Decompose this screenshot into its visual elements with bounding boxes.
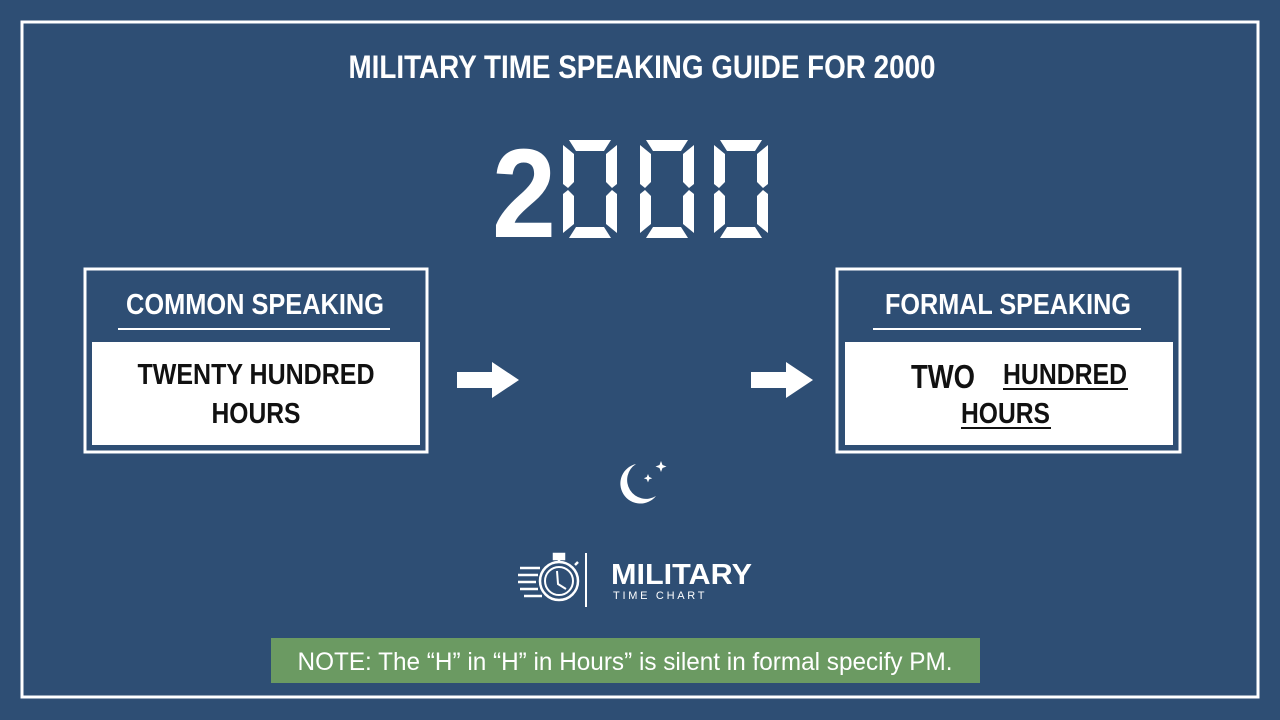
panel: formal speaking: HOURS (961, 398, 1050, 430)
panel: common speaking: HOURS (212, 398, 300, 430)
arrow left (457, 362, 519, 398)
logo: military time chart (518, 553, 752, 607)
panel: formal speaking: FORMAL SPEAKING (885, 289, 1131, 321)
panel: common speaking (85, 269, 427, 452)
panel: common speaking: COMMON SPEAKING (126, 289, 384, 321)
panel: formal speaking (837, 269, 1180, 452)
panel: formal speaking: HUNDRED (1003, 359, 1127, 391)
note bar (271, 638, 980, 683)
logo: military time chart: MILITARY (611, 559, 752, 591)
title: MILITARY TIME SPEAKING GUIDE FOR 2000 (348, 49, 936, 85)
panel: formal speaking: TWO (911, 358, 975, 395)
big time 2000: 2 (492, 123, 556, 264)
note bar: NOTE: The “H” in “H” in Hours” is silent in formal specify PM. (298, 648, 952, 676)
panel: common speaking: TWENTY HUNDRED (138, 359, 374, 391)
logo: military time chart: TIME CHART (613, 590, 707, 602)
big time 2000 (492, 123, 768, 264)
icon: moon (620, 461, 666, 504)
arrow right (751, 362, 813, 398)
